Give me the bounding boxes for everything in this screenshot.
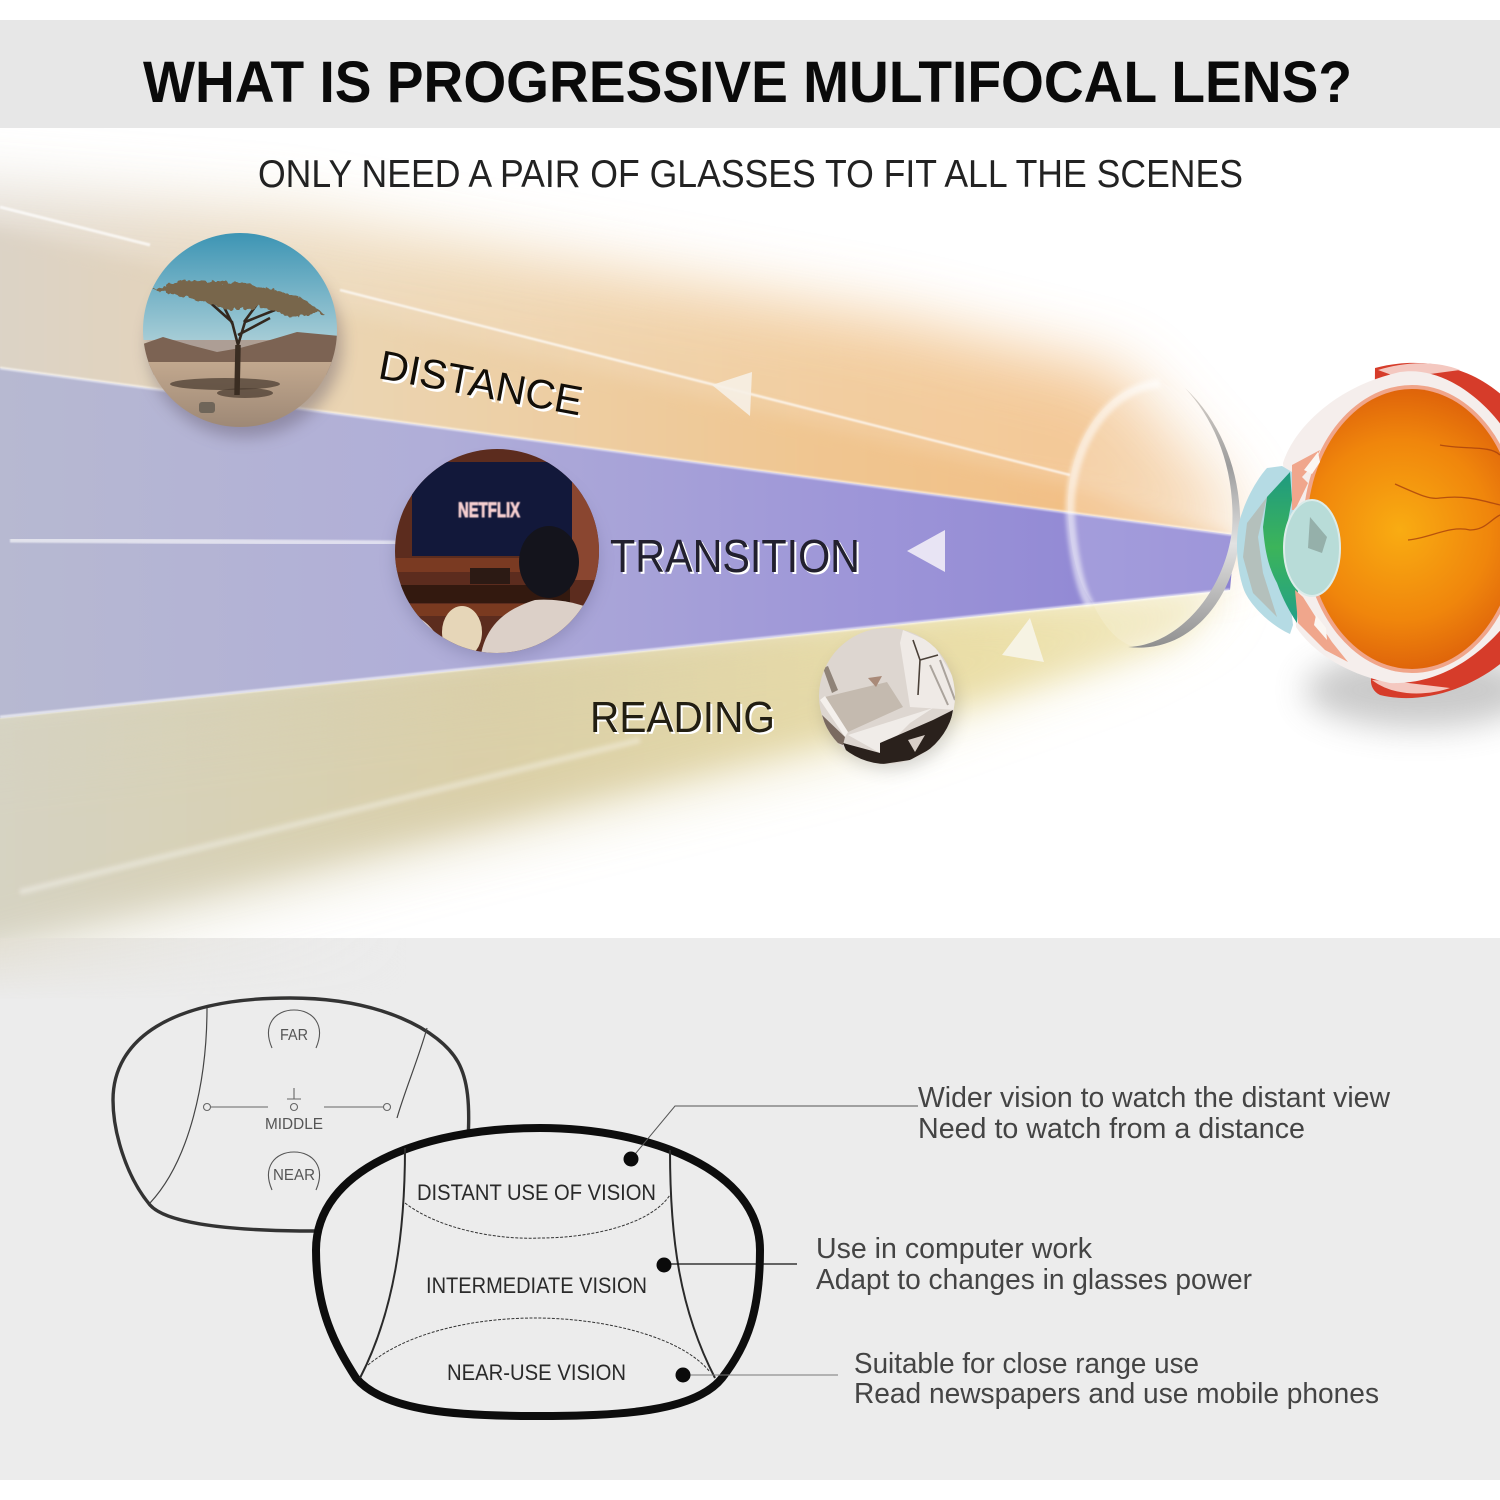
- light beams: [0, 185, 1235, 985]
- near-use label: NEAR-USE VISION: [447, 1360, 626, 1385]
- middle label: MIDDLE: [265, 1116, 323, 1133]
- label: reading: READING: [592, 695, 777, 744]
- callout: distant: [624, 1082, 1391, 1166]
- iris: [1263, 472, 1298, 623]
- callout: intermediate: Adapt to changes in glasses power: [816, 1264, 1252, 1296]
- callout: near: Suitable for close range use: [854, 1348, 1199, 1380]
- sclera: [1283, 371, 1500, 683]
- cornea: [1237, 466, 1296, 634]
- distance scene: tree photo: [140, 230, 342, 437]
- ciliary body: [1292, 450, 1320, 510]
- near label: NEAR: [273, 1167, 315, 1184]
- distant label: DISTANT USE OF VISION: [417, 1180, 656, 1205]
- transition scene: watching TV photo: [390, 445, 605, 660]
- callout: distant: Need to watch from a distance: [918, 1113, 1305, 1145]
- intermediate label: INTERMEDIATE VISION: [426, 1273, 647, 1298]
- label: reading: READING: [590, 693, 775, 742]
- title: WHAT IS PROGRESSIVE MULTIFOCAL LENS?: [143, 50, 1352, 115]
- header band: [0, 20, 1500, 128]
- label: distance: DISTANCE: [375, 342, 586, 424]
- subtitle: ONLY NEED A PAIR OF GLASSES TO FIT ALL THE SCENES: [258, 153, 1243, 196]
- reading scene: book photo: [815, 625, 960, 770]
- veins: [1395, 445, 1500, 540]
- lens diagram: back lens: [113, 998, 469, 1231]
- callout: distant: Wider vision to watch the distant view: [918, 1082, 1391, 1114]
- fitting cross and circles: [204, 1088, 390, 1110]
- callout: intermediate: [656, 1233, 1252, 1296]
- far label: FAR: [280, 1027, 308, 1044]
- callout: near: Read newspapers and use mobile phones: [854, 1378, 1379, 1410]
- eye anatomy: [1237, 363, 1500, 728]
- netflix logo: NETFLIX: [458, 499, 520, 522]
- label: transition: TRANSITION: [610, 530, 860, 582]
- outer red muscle: [1371, 363, 1500, 698]
- spectacle lens: [1068, 382, 1240, 648]
- callout: intermediate: Use in computer work: [816, 1233, 1092, 1265]
- bottom panel: [0, 938, 1500, 1480]
- arrow: transition: [907, 530, 945, 572]
- label: transition: TRANSITION: [612, 532, 862, 584]
- crystalline lens: [1284, 500, 1340, 596]
- arrow: reading: [1002, 618, 1044, 662]
- label: distance: DISTANCE: [377, 345, 588, 427]
- callout: near: [676, 1348, 1379, 1410]
- lens diagram: front lens: [316, 1128, 760, 1416]
- near/far zone arcs: [269, 1010, 319, 1048]
- choroid: [1303, 385, 1500, 673]
- eye shadow: [1305, 652, 1500, 728]
- arrow: distance: [712, 372, 752, 416]
